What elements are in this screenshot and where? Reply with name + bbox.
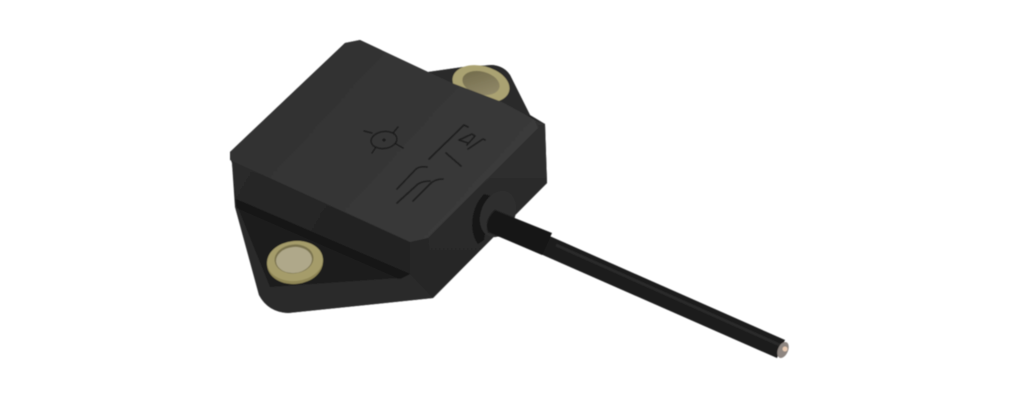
cable xyxy=(487,210,791,360)
icon: front brass washer xyxy=(265,238,325,287)
body silhouette xyxy=(230,40,547,313)
cable grommet xyxy=(472,185,523,244)
sensor body xyxy=(230,40,547,313)
cable thick section xyxy=(487,210,552,255)
right side face xyxy=(428,120,547,298)
top face xyxy=(230,40,538,242)
logo marking xyxy=(397,125,485,203)
back flange xyxy=(428,65,530,125)
cable long section xyxy=(536,234,785,358)
cable tip conductors xyxy=(775,340,791,360)
icon: rear brass washer xyxy=(449,60,513,108)
cable highlight xyxy=(556,245,782,346)
front flange lip xyxy=(235,206,433,313)
flange groove xyxy=(236,199,410,279)
icon: crosshair marking xyxy=(364,127,403,153)
wall chamfer xyxy=(410,238,433,298)
front wall xyxy=(230,158,433,298)
flange recess xyxy=(238,208,398,287)
